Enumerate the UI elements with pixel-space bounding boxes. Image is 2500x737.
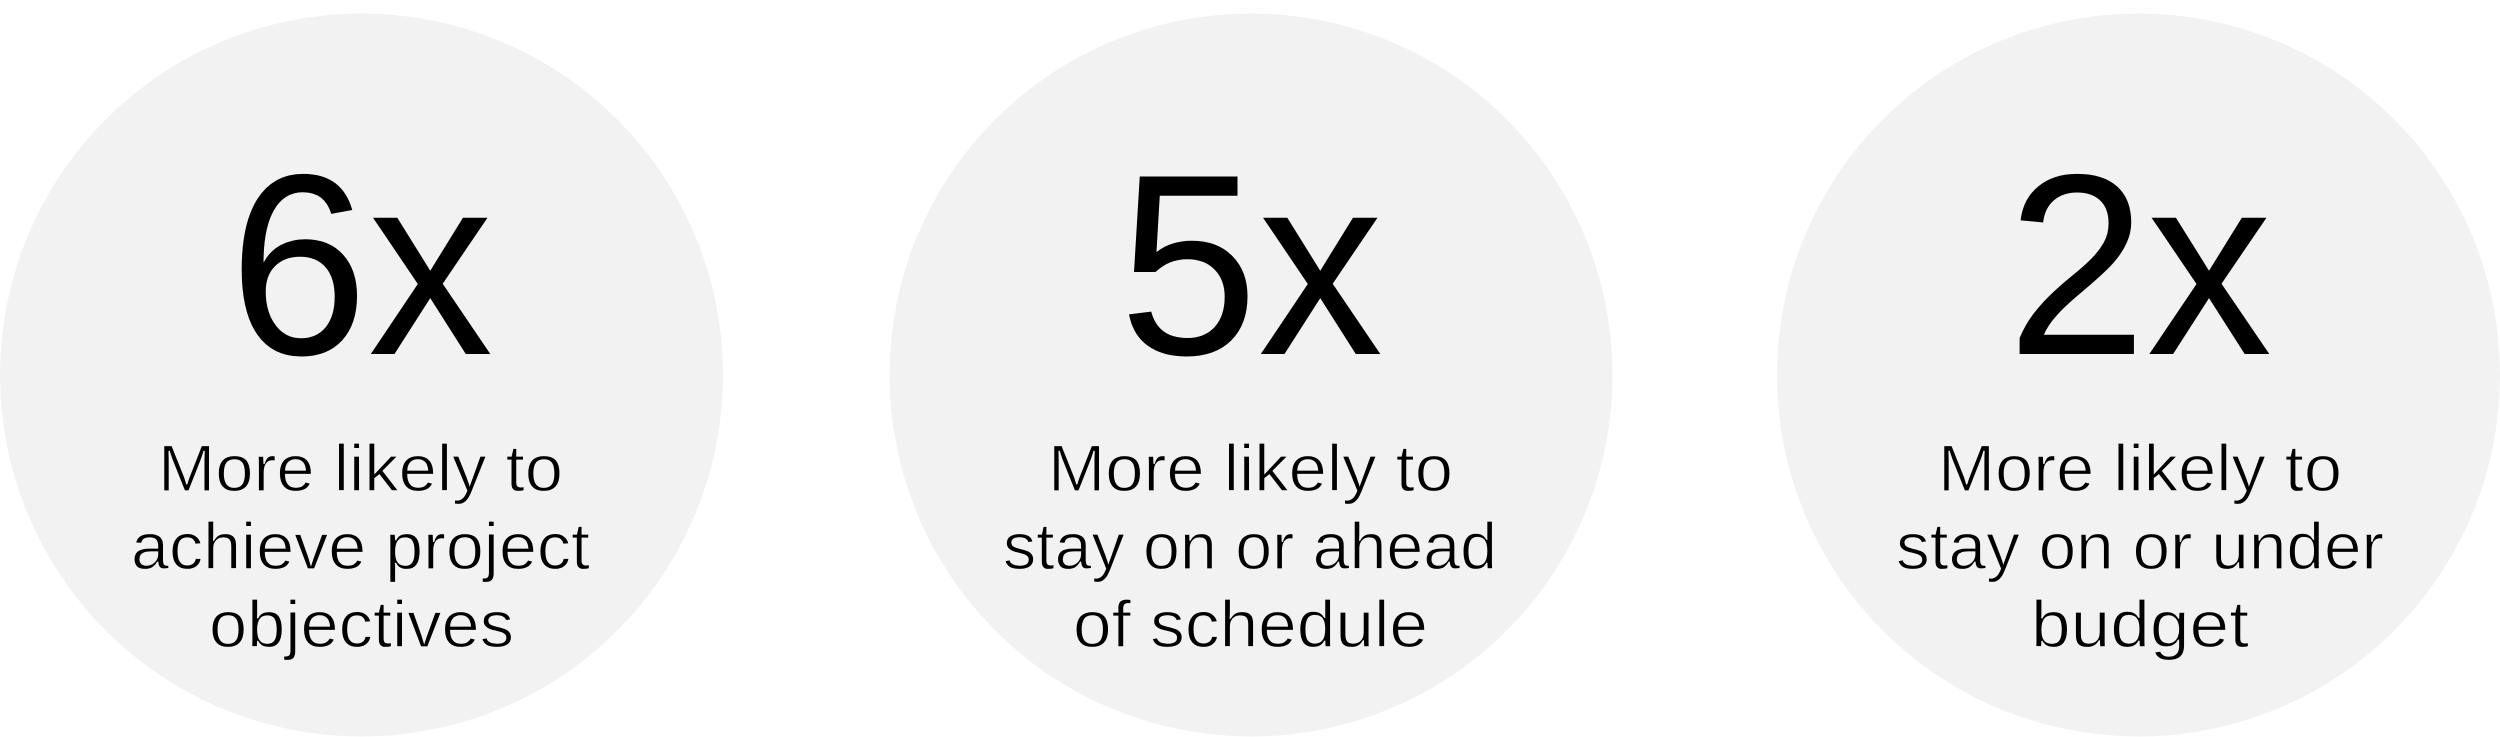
text: stay on or ahead of schedule: of schedule: [1073, 587, 1428, 661]
number: 2x: 2x: [2007, 120, 2272, 409]
panel: 2x budget: [1777, 14, 2500, 736]
text: achieve project objectives: [131, 431, 590, 661]
text: stay on or ahead of schedule: [1003, 431, 1497, 661]
text: achieve project objectives: More likely to: [158, 431, 563, 505]
text: stay on or under budget: More likely to: [1938, 431, 2342, 505]
text: achieve project objectives: achieve project: [131, 509, 590, 583]
number: 6x: 6x: [229, 120, 493, 409]
text: stay on or ahead of schedule: More likely to: [1048, 431, 1453, 505]
number: 5x: 5x: [1119, 120, 1383, 409]
text: achieve project objectives: objectives: [209, 587, 514, 661]
text: stay on or ahead of schedule: stay on or ahead: [1003, 509, 1497, 583]
text: stay on or under budget: budget: [2031, 587, 2249, 661]
panel: 6x objectives: [0, 14, 723, 736]
text: stay on or under budget: stay on or under: [1896, 509, 2384, 583]
text: stay on or under budget: [1896, 431, 2384, 661]
panel: 5x schedule: [890, 14, 1612, 736]
